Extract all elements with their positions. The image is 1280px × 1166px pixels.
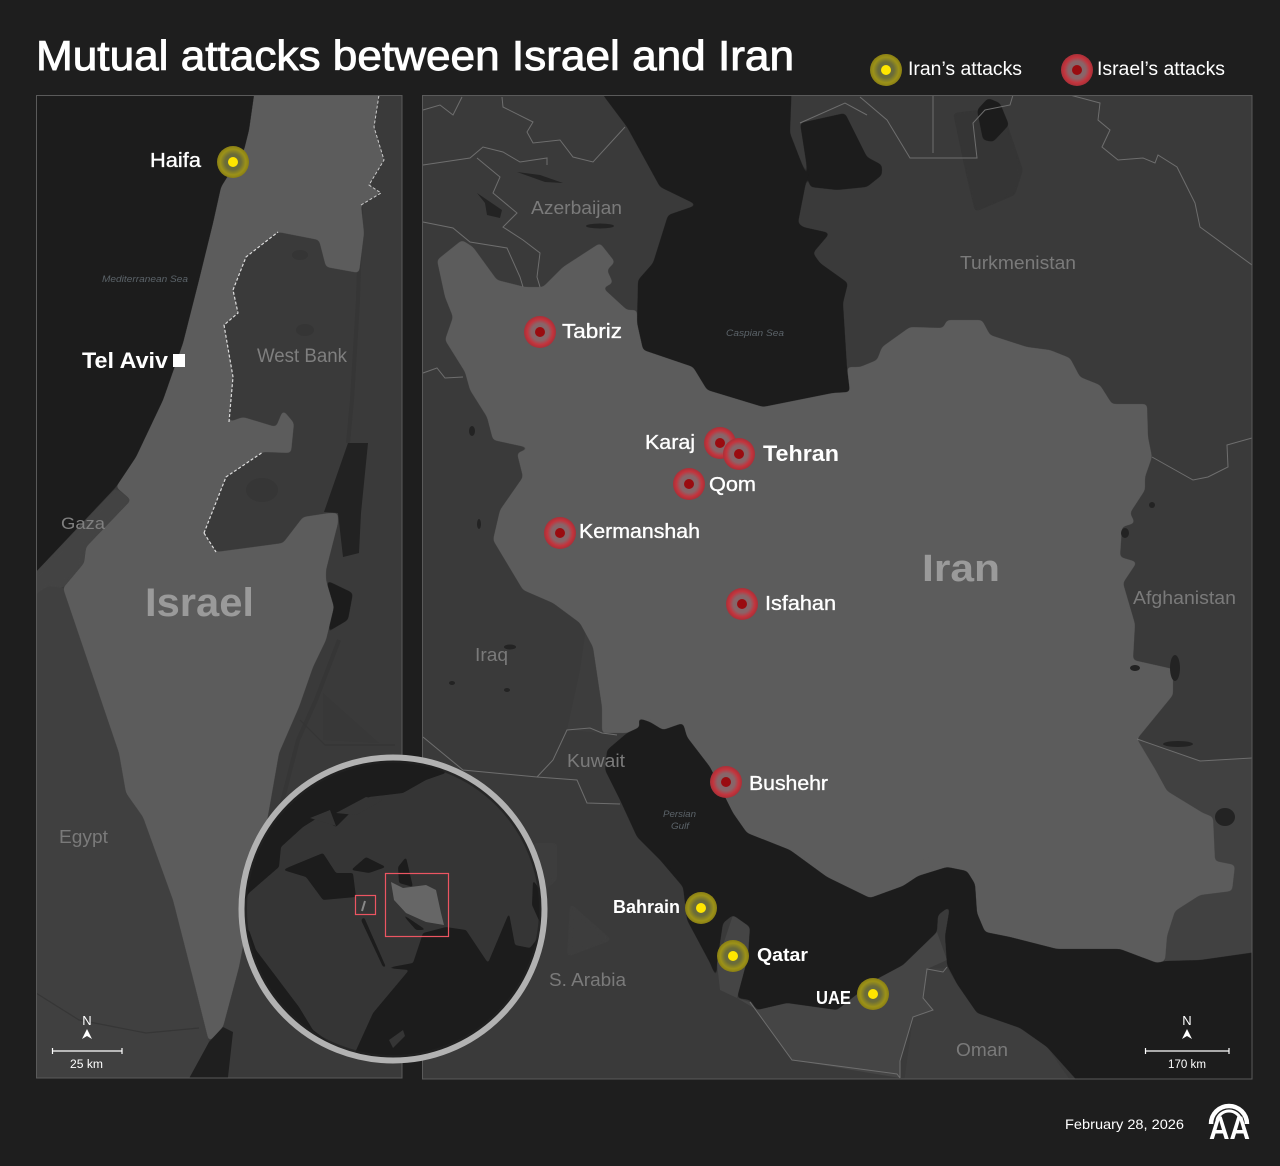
- sea: Gulf of Aqaba: [328, 582, 352, 630]
- land: Iran: [437, 240, 1235, 963]
- city: Tabriz: [524, 316, 622, 348]
- label: Persian Gulf: [663, 809, 696, 832]
- city: Isfahan: [726, 588, 836, 620]
- panel: Israel map: [20, 80, 402, 1095]
- label: Mediterranean Sea: Mediterranean Sea: [102, 274, 188, 285]
- city: Haifa: Haifa: [150, 150, 202, 172]
- label: West Bank: West Bank: [257, 346, 347, 367]
- label: Israel: Israel: [145, 581, 254, 625]
- label: Persian Gulf: Gulf: [671, 821, 690, 832]
- lakes and small water bodies: [449, 172, 1235, 826]
- sea: Red Sea: [190, 1027, 233, 1078]
- date: February 28, 2026: [1065, 1116, 1184, 1132]
- land: Egypt: [20, 572, 209, 1095]
- city: Tehran: [723, 438, 839, 470]
- label: Oman: Oman: [956, 1040, 1008, 1060]
- land: West Bank: [204, 452, 263, 533]
- target: Qatar: [717, 940, 808, 972]
- city: Isfahan: Isfahan: [765, 593, 836, 615]
- city: Qom: [673, 468, 756, 500]
- globe land details: [310, 797, 405, 1048]
- panel: Iran map: [422, 80, 1270, 1095]
- north arrow and scale: right: [1145, 1013, 1229, 1071]
- label: Azerbaijan: Azerbaijan: [531, 198, 622, 218]
- north arrow and scale: right: N: [1182, 1013, 1192, 1028]
- title: Mutual attacks between Israel and Iran: [36, 32, 794, 79]
- sea: Persian Gulf and Gulf of Oman: [605, 718, 1270, 1095]
- land: Gaza: [37, 490, 129, 587]
- legend: [870, 54, 1225, 86]
- legend: Iran's attacks: [870, 54, 1022, 86]
- city: Haifa: [150, 146, 249, 178]
- city: Tabriz: Tabriz: [562, 321, 622, 343]
- label: S. Arabia: S. Arabia: [549, 970, 627, 990]
- globe seas: [248, 763, 539, 1055]
- north arrow and scale: left: N: [82, 1013, 92, 1028]
- city: Qom: Qom: [709, 474, 756, 496]
- logo: Anadolu Agency: AA: [1209, 1110, 1250, 1146]
- locator box: Iran: [386, 874, 448, 936]
- label: Turkmenistan: Turkmenistan: [960, 253, 1076, 273]
- sea: Mediterranean: [37, 96, 254, 570]
- target: Qatar: Qatar: [757, 945, 808, 965]
- city: Tel Aviv: Tel Aviv: [82, 348, 169, 373]
- target: Bahrain: [613, 892, 717, 924]
- legend: Israel's attacks: [1061, 54, 1225, 86]
- city: Kermanshah: [544, 517, 700, 549]
- country borders: [423, 95, 1252, 1078]
- north arrow and scale: right: 170 km: [1168, 1059, 1206, 1071]
- label: Iran: Iran: [922, 548, 1000, 590]
- locator box: Israel: [356, 896, 376, 914]
- city: Kermanshah: Kermanshah: [579, 521, 700, 543]
- label: Persian Gulf: Persian: [663, 809, 696, 820]
- globe: Iran highlight: [391, 882, 444, 925]
- globe inset: [238, 754, 548, 1064]
- city: Tehran: Tehran: [763, 441, 839, 466]
- legend: Iran's attacks: Iran’s attacks: [908, 59, 1022, 80]
- label: Gaza: Gaza: [61, 514, 106, 533]
- label: Caspian Sea: Caspian Sea: [726, 328, 784, 339]
- label: Kuwait: Kuwait: [567, 751, 625, 771]
- north arrow and scale: left: [52, 1013, 122, 1071]
- city: Bushehr: [710, 766, 828, 798]
- city: Karaj: [645, 427, 736, 459]
- north arrow and scale: left: 25 km: [70, 1059, 103, 1071]
- city: Bushehr: Bushehr: [749, 773, 828, 795]
- sea: Caspian Sea and Kara-Bogaz: [603, 80, 1009, 407]
- sea: Dead Sea: [324, 443, 368, 557]
- land: Israel: [63, 80, 384, 1042]
- target: Bahrain: Bahrain: [613, 897, 680, 917]
- label: Iraq: Iraq: [475, 645, 508, 665]
- target: UAE: [816, 978, 889, 1010]
- legend: Israel's attacks: Israel’s attacks: [1097, 59, 1225, 80]
- label: Afghanistan: Afghanistan: [1133, 588, 1236, 608]
- city: Karaj: Karaj: [645, 432, 695, 454]
- target: UAE: UAE: [816, 988, 851, 1008]
- label: Egypt: Egypt: [59, 827, 108, 847]
- country labels: [475, 198, 1236, 1060]
